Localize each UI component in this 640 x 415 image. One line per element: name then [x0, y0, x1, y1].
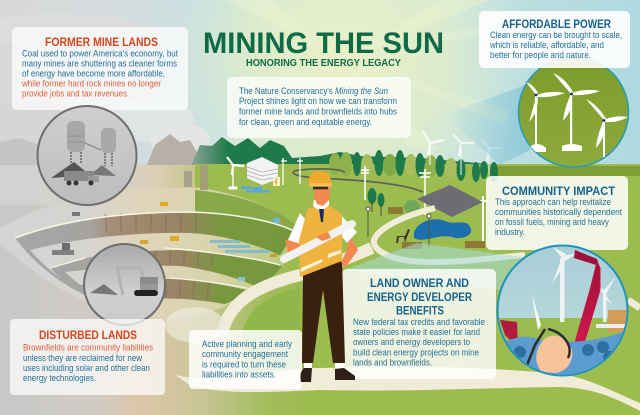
building with charger — [241, 157, 280, 192]
lower ground — [0, 205, 310, 415]
panel: community impact: This approach can help revitalize — [495, 197, 611, 207]
panel: project intro — [227, 77, 411, 138]
curved beige path — [222, 248, 372, 335]
title: MINING THE SUN — [203, 27, 444, 60]
panel: project intro: Project shines light on how we can transform — [239, 96, 397, 106]
subtitle: HONORING THE ENERGY LEGACY — [246, 58, 401, 69]
panel: land owner and energy developer benefits — [342, 269, 496, 379]
dark green forest hills — [190, 137, 500, 180]
small trees and bushes — [368, 188, 420, 216]
pit machinery — [52, 202, 283, 281]
panel: community impact: COMMUNITY IMPACT — [502, 186, 615, 198]
panel: community impact: industry. — [495, 227, 525, 237]
body text: former mine lands — [21, 48, 178, 98]
body text: former mine lands: many mines are shuttering as cleaner forms — [22, 58, 177, 68]
pond — [414, 219, 471, 240]
panel: land owner and energy developer benefits: lands and brownfields. — [353, 358, 432, 368]
body text: disturbed lands: Brownfields are community liabilities — [23, 342, 154, 352]
utility poles — [281, 158, 489, 245]
heading: former mine lands: FORMER MINE LANDS — [45, 37, 158, 49]
mountains — [146, 134, 205, 167]
panel: active planning: Active planning and early — [202, 339, 293, 349]
panel: active planning — [189, 330, 302, 389]
sun glow and rays — [150, 0, 550, 260]
panel: active planning: is required to turn these — [202, 360, 286, 370]
panel: active planning: liabilities into assets. — [202, 370, 276, 380]
right side path — [628, 300, 640, 308]
panel: land owner and energy developer benefits: ENERGY DEVELOPER — [367, 292, 473, 304]
panel: active planning: community engagement — [202, 349, 288, 359]
icon circle: excavator — [84, 244, 165, 325]
plant ruins in the haze — [184, 165, 208, 190]
panel: land owner and energy developer benefits: build clean energy projects on mine — [353, 348, 479, 358]
panel: land owner and energy developer benefits: New federal tax credits and favorable — [353, 317, 485, 327]
solar panels in pit — [210, 240, 269, 253]
panel: disturbed lands — [10, 319, 165, 395]
body text: former mine lands: Coal used to power America's economy, but — [22, 48, 178, 58]
panel: affordable power: better for people and nature. — [490, 50, 591, 60]
panel: land owner and energy developer benefits: LAND OWNER AND — [370, 278, 469, 290]
panel: community impact — [486, 176, 628, 250]
body text: former mine lands: while former hard rock mines no longer — [21, 78, 161, 88]
body text: disturbed lands: energy technologies. — [23, 373, 96, 383]
panel: affordable power: AFFORDABLE POWER — [502, 19, 612, 31]
heading: disturbed lands: DISTURBED LANDS — [39, 330, 137, 342]
panel: community impact: on fossil fuels, mining and heavy — [495, 217, 609, 227]
icon circle: wind turbines — [518, 57, 628, 167]
spotlight to land owner panel — [345, 243, 530, 290]
body text: disturbed lands — [23, 342, 154, 383]
panel: affordable power: Clean energy can be brought to scale, — [490, 30, 622, 40]
access road — [293, 169, 423, 192]
smoke clouds — [0, 14, 210, 172]
far field — [497, 166, 640, 176]
tree row — [329, 150, 498, 182]
park path loop — [374, 208, 525, 262]
panel: project intro: former mine lands and brownfields into hubs — [239, 106, 397, 116]
lawn under path — [243, 287, 300, 385]
panel: affordable power: which is reliable, affordable, and — [489, 40, 604, 50]
distant wind turbines — [423, 131, 501, 175]
icon circle: ribbon cutting — [497, 246, 629, 376]
small turbine by building — [227, 157, 244, 189]
horizon sand — [0, 165, 200, 210]
body text: disturbed lands: uses including solar and other clean — [23, 363, 150, 373]
panel: community impact: communities historically dependent — [495, 207, 622, 217]
spotlight behind affordable power circle — [445, 85, 530, 165]
panel: land owner and energy developer benefits: BENEFITS — [396, 306, 444, 318]
benches — [402, 241, 485, 249]
mine pit — [0, 188, 302, 320]
panel: former mine lands — [12, 27, 188, 110]
panel: land owner and energy developer benefits: state policies make it easier for land — [353, 327, 480, 337]
panel: affordable power — [479, 11, 630, 68]
bottom path — [175, 367, 640, 411]
fog near pit bottom — [165, 307, 225, 343]
panel: project intro: The Nature Conservancy's Mining the Sun — [239, 86, 388, 96]
icon circle: silos and truck — [38, 106, 136, 205]
deer — [396, 229, 410, 243]
person: engineer with rolled plans — [284, 171, 358, 382]
green land — [195, 164, 640, 415]
body text: former mine lands: provide jobs and tax revenues. — [22, 88, 129, 98]
panel: project intro: for clean, green and equitable energy. — [239, 117, 372, 127]
lamps — [366, 207, 431, 247]
panel: land owner and energy developer benefits: owners and energy developers to — [353, 337, 470, 347]
body text: former mine lands: of energy have become more affordable, — [22, 68, 165, 78]
solar farm — [417, 185, 483, 217]
body text: disturbed lands: unless they are reclaimed for new — [23, 353, 143, 363]
